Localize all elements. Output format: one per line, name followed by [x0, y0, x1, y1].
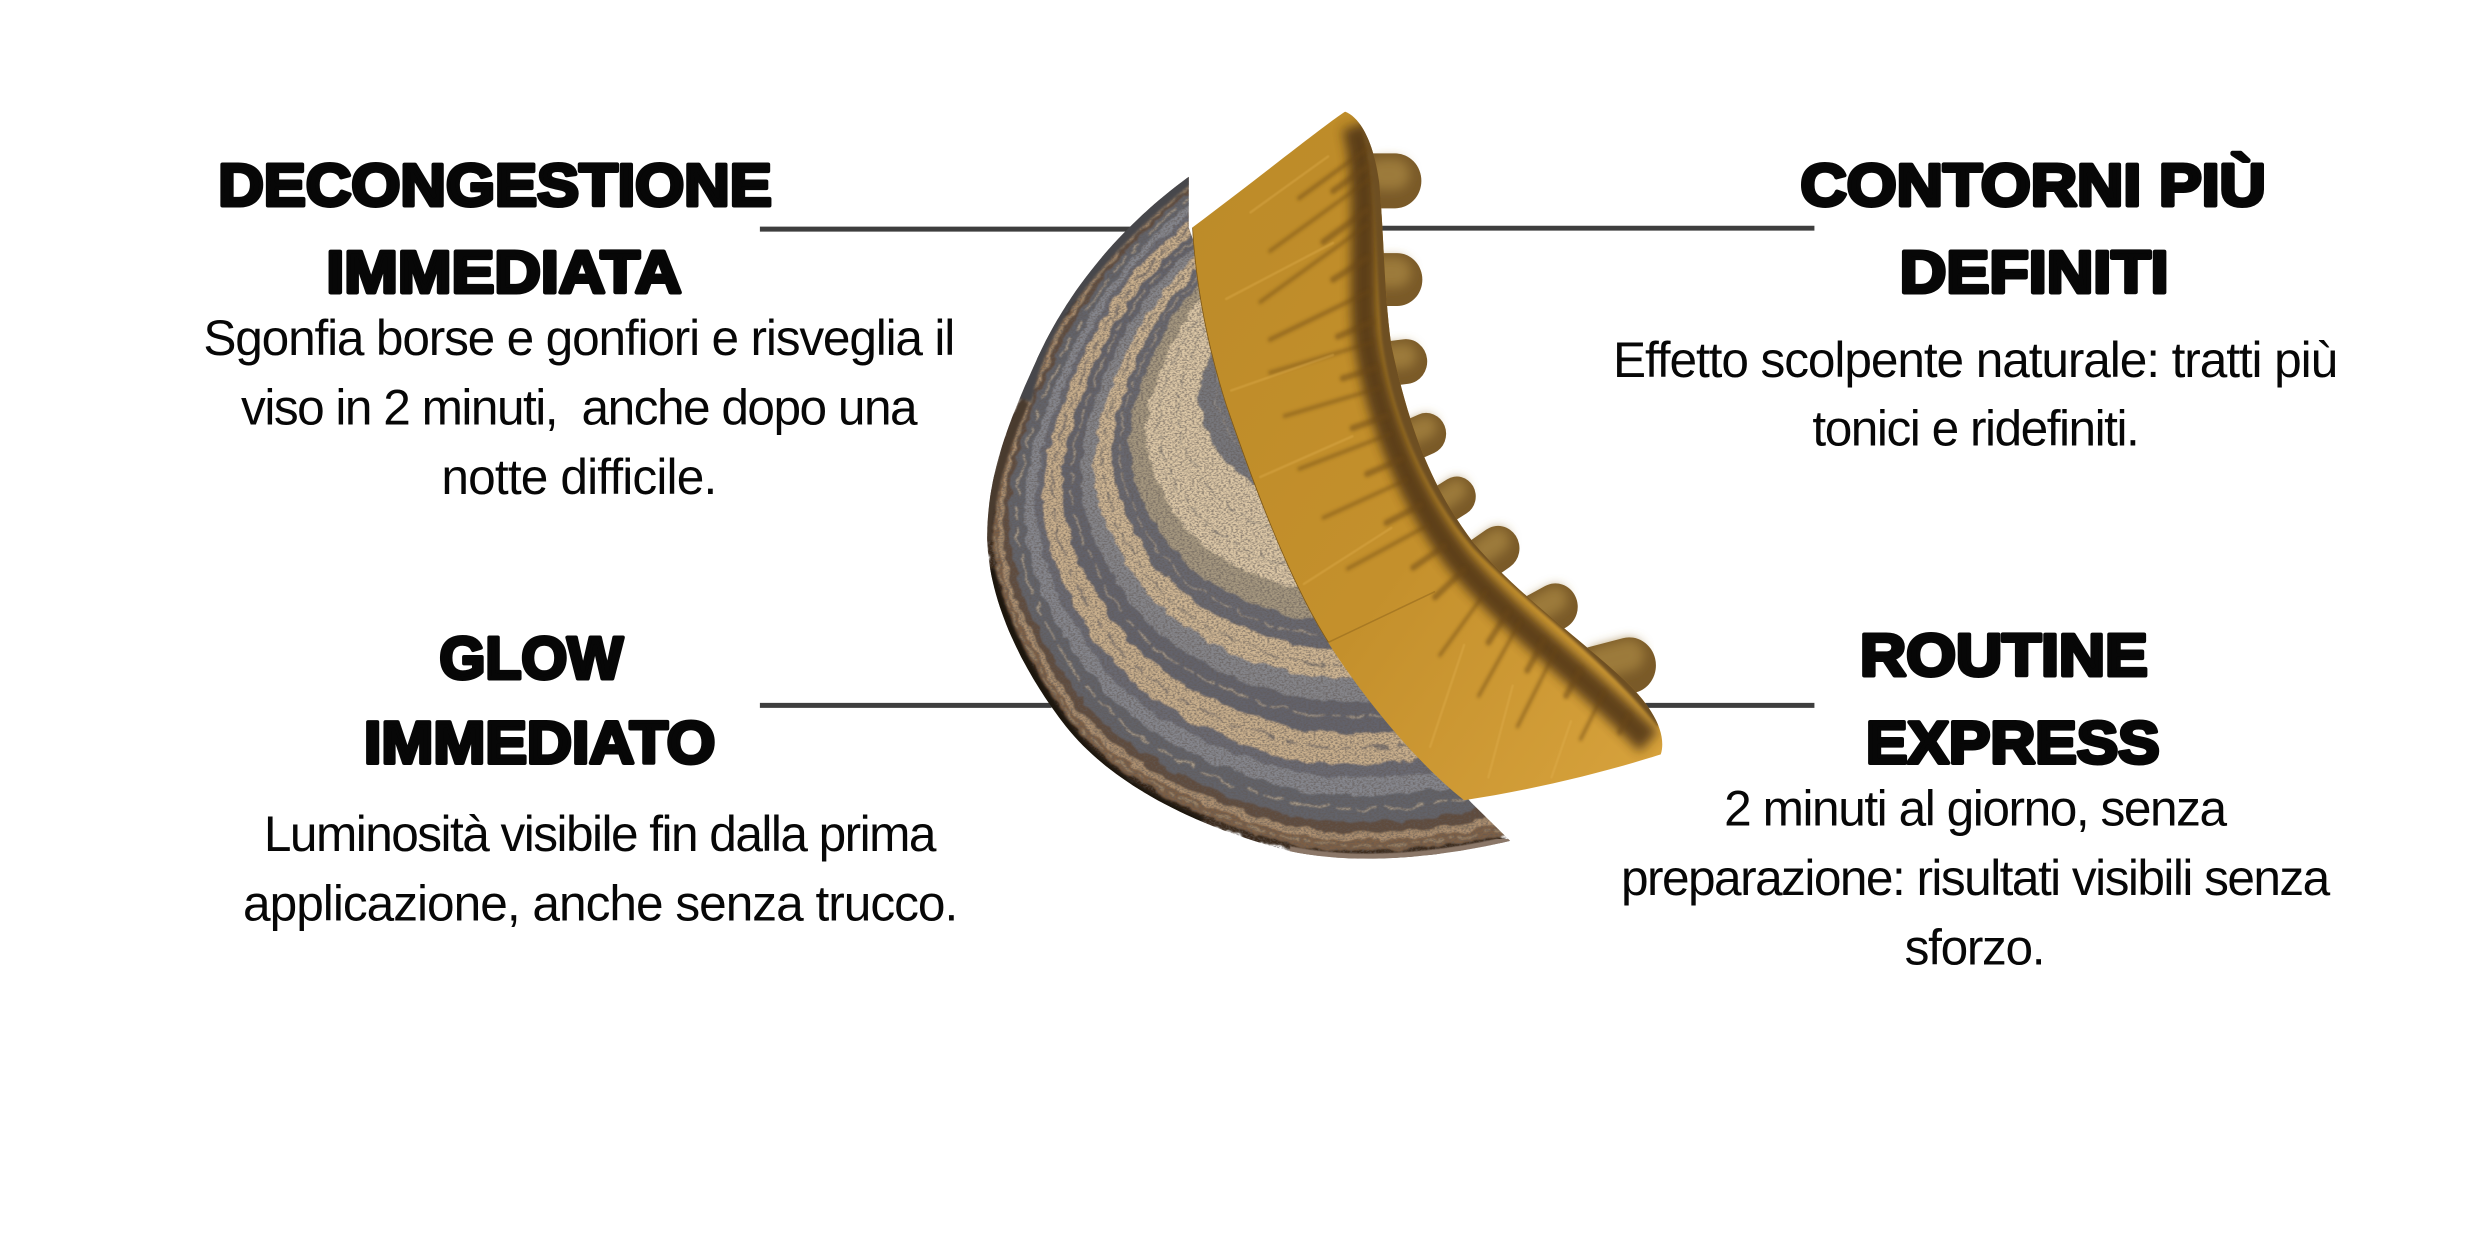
body text: routine: 2 minuti al giorno, senza: [1724, 780, 2228, 836]
heading: glow immediato: IMMEDIATO: [364, 709, 715, 776]
text block: contorni più definiti: [1613, 151, 2338, 456]
heading: decongestione immediata: DECONGESTIONE: [218, 151, 772, 218]
connector line: routine: [1637, 703, 1814, 708]
heading: contorni più definiti: DEFINITI: [1900, 239, 2169, 306]
heading: routine express: ROUTINE: [1860, 622, 2148, 689]
icon: face brush product: [979, 90, 1683, 869]
body text: routine: preparazione: risultati visibili senza: [1621, 850, 2331, 906]
heading: decongestione immediata: [218, 151, 772, 306]
connector line: contorni: [1379, 226, 1814, 231]
dark band where bristles meet the ferrule: [1355, 126, 1649, 742]
heading: decongestione immediata: IMMEDIATA: [326, 239, 682, 306]
body text: glow: [243, 806, 958, 932]
brush bristles: [1192, 112, 1662, 800]
body text: decongestione: viso in 2 minuti, anche dopo una: [241, 380, 918, 436]
bristle hair streaks: [1260, 149, 1629, 739]
body text: glow: applicazione, anche senza trucco.: [243, 876, 958, 932]
body text: decongestione: notte difficile.: [441, 449, 717, 505]
heading: contorni più definiti: [1801, 151, 2266, 306]
heading: glow immediato: GLOW: [439, 625, 624, 692]
heading: glow immediato: [364, 625, 715, 776]
body text: contorni: tonici e ridefiniti.: [1812, 400, 2140, 456]
text block: routine express: [1621, 622, 2331, 975]
heading: routine express: [1860, 622, 2160, 776]
body text: decongestione: Sgonfia borse e gonfiori e risveglia il: [203, 310, 955, 366]
brush handle with swirled wood bands: [979, 167, 1522, 869]
body text: contorni: [1613, 332, 2338, 456]
text block: decongestione immediata: [203, 151, 955, 505]
body text: decongestione: [203, 310, 955, 505]
brush comb knobs: [1369, 174, 1629, 676]
heading: contorni più definiti: CONTORNI PIÙ: [1801, 151, 2266, 218]
text block: glow immediato: [243, 625, 958, 932]
heading: routine express: EXPRESS: [1866, 709, 2160, 776]
body text: routine: sforzo.: [1905, 919, 2046, 975]
body text: routine: [1621, 780, 2331, 975]
connector line: decongestione: [760, 227, 1131, 232]
body text: contorni: Effetto scolpente naturale: tratti più: [1613, 332, 2338, 388]
body text: glow: Luminosità visibile fin dalla prima: [264, 806, 937, 862]
connector line: glow: [760, 703, 1052, 708]
